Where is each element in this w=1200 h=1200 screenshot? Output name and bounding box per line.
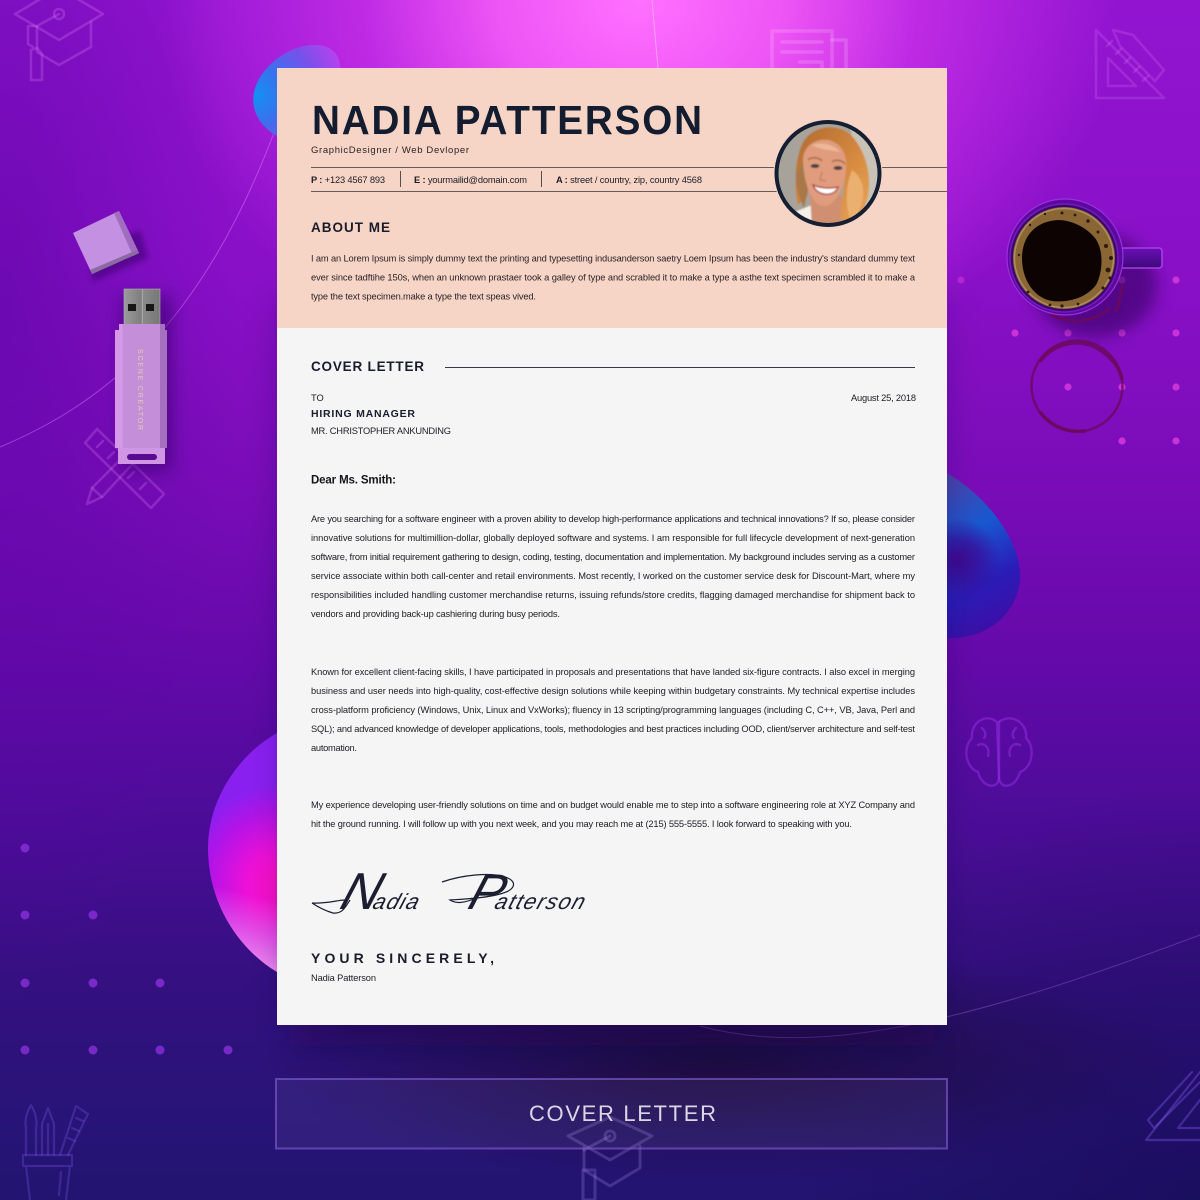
icon: document top center — [772, 31, 846, 68]
icon: set square and pencil bottom right — [1146, 1072, 1200, 1140]
USB connector — [124, 289, 160, 325]
paragraph 2: cross-platform proficiency (Windows, Unix, Linux and VxWorks); fluency in 13 scripting/programming languages (including C, C++, VB, Java, Perl and — [311, 705, 915, 715]
about me text — [311, 254, 916, 302]
portrait photo — [774, 119, 882, 228]
paragraph 1: Are you searching for a software engineer with a proven ability to develop high-performance applications and technical innovations? If so, please consider — [311, 514, 915, 524]
icon: graduation cap bottom center — [568, 1117, 652, 1200]
about me text: type the text specimen.make a type the text speas vived. — [311, 292, 536, 302]
contact row — [311, 171, 702, 187]
job title: GraphicDesigner / Web Devloper — [311, 145, 469, 156]
recipient block: HIRING MANAGER — [311, 408, 415, 420]
about me heading: ABOUT ME — [311, 220, 390, 235]
panel: letter body — [277, 328, 947, 1025]
paragraph 3 — [311, 800, 915, 829]
recipient block: MR. CHRISTOPHER ANKUNDING — [311, 426, 451, 436]
name heading: NADIA PATTERSON — [312, 98, 702, 143]
paragraph 2: business and user needs into high-quality, cost-effective design solutions while keeping within budgetary constraints. My technical expertise includes — [311, 686, 915, 696]
signature: Nadia — [334, 863, 433, 921]
cup shadow — [1033, 233, 1157, 337]
paragraph 1: software, from initial requirement gathering to design, coding, testing, documentation and implementation. My background includes serving as a customer — [311, 552, 915, 562]
salutation: Dear Ms. Smith: — [311, 474, 396, 486]
paragraph 3: hit the ground running. I will follow up with you next week, and you may reach me at (215) 555-5555. I look forward to speaking with you. — [311, 819, 852, 829]
recipient block: TO — [311, 393, 324, 403]
icon: ruler and pencil crossed — [85, 429, 164, 508]
paragraph 3: My experience developing user-friendly solutions on time and on budget would enable me to step into a software engineering role at XYZ Company and — [311, 800, 915, 810]
icon: pencil cup bottom left — [23, 1105, 88, 1200]
panel: header — [277, 68, 947, 328]
background dots: lower left grid — [20, 844, 232, 1054]
signature — [312, 863, 599, 921]
USB drive — [115, 289, 172, 471]
contact rules — [311, 168, 947, 192]
paper: cover letter sheet — [277, 68, 947, 1025]
date: August 25, 2018 — [851, 393, 916, 403]
paragraph 1: service associate within both call-center and retail environments. Most recently, I worked on the customer service desk for Discount-Mart, where my — [311, 571, 915, 581]
USB tail — [118, 446, 165, 464]
recipient block — [311, 393, 451, 436]
paragraph 1: vendors and providing back-up cashiering during busy periods. — [311, 609, 560, 619]
cup rim — [1007, 199, 1123, 315]
paper shadow — [290, 300, 935, 1045]
thin curved line: top arc — [652, 0, 658, 68]
icon: graduation cap top left — [15, 0, 103, 80]
background dots: right grid — [957, 276, 1180, 445]
title button panel — [276, 1079, 947, 1148]
coffee cup — [1007, 199, 1162, 337]
cover letter heading: COVER LETTER — [311, 359, 424, 374]
decorative blob: right side — [947, 473, 1020, 638]
closing: YOUR SINCERELY, — [311, 950, 494, 966]
signature: Patterson — [463, 864, 599, 920]
cup handle — [1120, 248, 1162, 268]
paragraph 2 — [311, 667, 915, 753]
decorative blob: top left behind paper — [253, 45, 340, 136]
signer name: Nadia Patterson — [311, 973, 376, 983]
thin curved line: lower right arc — [700, 935, 1200, 1038]
bottom title: COVER LETTER — [529, 1101, 716, 1126]
contact row: E : yourmailid@domain.com — [414, 175, 527, 185]
about me text: I am an Lorem Ipsum is simply dummy text the printing and typesetting indusanderson saetry Loem Ipsum has been the industry's standard dummy text — [311, 254, 915, 264]
paragraph 1 — [311, 514, 915, 619]
coffee foam — [1013, 207, 1115, 309]
paragraph 2: automation. — [311, 743, 357, 753]
thin curved line: left arc — [0, 130, 275, 447]
coffee stain ring — [1032, 340, 1122, 432]
USB label: SCENE CREATOR — [136, 349, 143, 430]
paragraph 1: innovative solutions for multimillion-dollar, globally deployed software and systems. I am responsible for full lifecycle development of next-generation — [311, 533, 915, 543]
coffee surface — [1022, 220, 1102, 301]
about me text: ever since tadftihe 150s, when an unknown prastaer took a galley of type and scrabled it to make a type a asthe text specimen scrambled it to make a — [311, 272, 916, 282]
USB body — [115, 324, 167, 448]
coffee spill arc under cup — [1050, 285, 1122, 321]
paragraph 1: responsibilities included handling customer merchandise returns, issuing refunds/store credits, flagging damaged merchandise for shipment back to — [311, 590, 915, 600]
decorative blob: lower left — [208, 733, 277, 972]
USB drive cap — [73, 211, 148, 282]
icon: brain — [966, 718, 1032, 786]
contact row: P : +123 4567 893 — [311, 175, 385, 185]
paragraph 2: SQL); and advanced knowledge of developer applications, tools, methodologies and best practices including OOD, client/server architecture and self-test — [311, 724, 915, 734]
icon: set square and pencil top right — [1096, 30, 1164, 98]
contact row: A : street / country, zip, country 4568 — [556, 175, 702, 185]
paragraph 2: Known for excellent client-facing skills, I have participated in proposals and presentations that have landed six-figure contracts. I also excel in merging — [311, 667, 915, 677]
